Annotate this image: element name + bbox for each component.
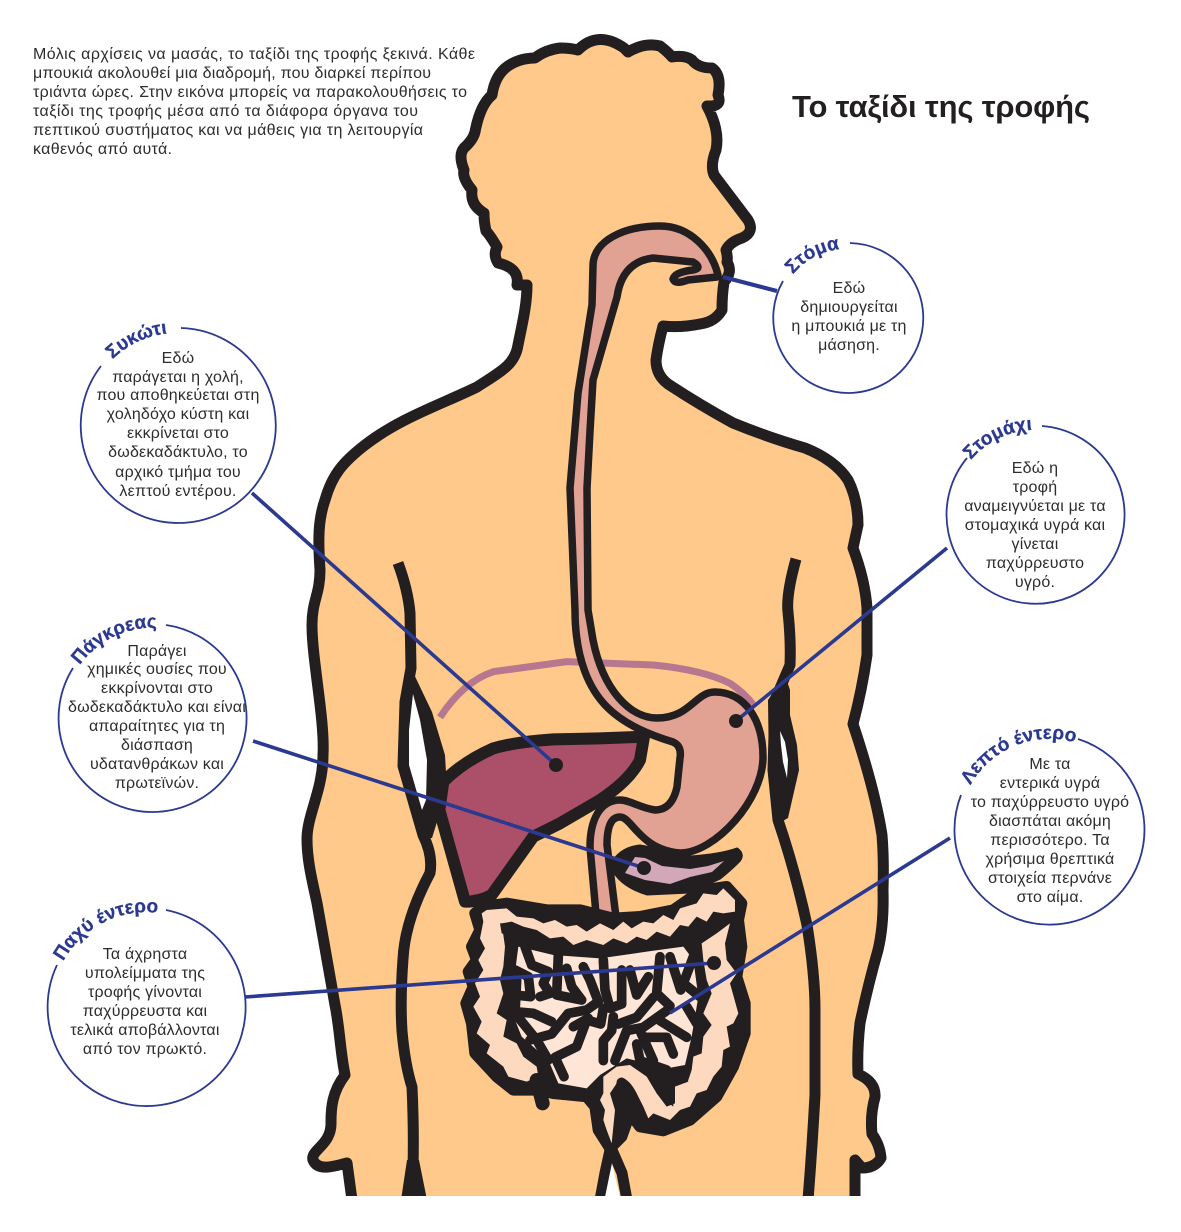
crotch xyxy=(600,1150,627,1200)
stomach pointer line xyxy=(736,548,947,721)
stomach pointer dot xyxy=(729,714,743,728)
large intestine text: παχύρρευστα και xyxy=(83,1003,208,1020)
large intestine circle xyxy=(48,910,246,1106)
liver text: που αποθηκεύεται στη xyxy=(96,387,260,404)
liver text: λεπτού εντέρου. xyxy=(119,483,237,500)
intro text: καθενός από αυτά. xyxy=(33,141,172,158)
pancreas pointer dot xyxy=(637,861,651,875)
liver pointer line xyxy=(252,493,556,765)
pancreas pointer line xyxy=(253,741,644,868)
intro text: ταξίδι της τροφής μέσα από τα διάφορα όργανα του xyxy=(33,103,418,120)
small intestine coils xyxy=(515,947,700,1077)
pancreas text: πρωτεϊνών. xyxy=(115,775,199,792)
large intestine label: Παχύ έντερο xyxy=(52,902,158,960)
stomach text: τροφή xyxy=(1013,479,1057,496)
stomach text: υγρό. xyxy=(1015,574,1055,591)
large intestine text: Τα άχρηστα xyxy=(103,946,187,963)
stomach circle xyxy=(947,426,1125,604)
intro text: τριάντα ώρες. Στην εικόνα μπορείς να παρακολουθήσεις το xyxy=(33,84,467,101)
mouth text xyxy=(791,280,907,354)
pancreas text: υδατανθράκων και xyxy=(90,756,224,773)
mouth circle xyxy=(773,243,923,393)
callout: large intestine xyxy=(46,902,721,1107)
left inner arm line xyxy=(398,563,431,1168)
pancreas text: δωδεκαδάκτυλο και είναι xyxy=(68,699,246,716)
callout: mouth xyxy=(722,239,924,394)
colon tail xyxy=(537,1080,543,1103)
small intestine text: εντερικά υγρά xyxy=(1000,775,1100,792)
mouth text: δημιουργείται xyxy=(800,299,898,316)
mouth text: Εδώ xyxy=(833,280,865,297)
liver text: Εδώ xyxy=(162,350,194,367)
small intestine circle xyxy=(954,739,1144,925)
small intestine text: στο αίμα. xyxy=(1017,889,1083,906)
liver text: χοληδόχο κύστη και xyxy=(107,406,250,423)
stomach text: αναμειγνύεται με τα xyxy=(964,498,1106,515)
liver xyxy=(439,737,644,902)
large intestine text: από τον πρωκτό. xyxy=(83,1041,207,1058)
small intestine text xyxy=(971,756,1129,906)
small intestine label: Λεπτό έντερο xyxy=(962,728,1076,786)
intro text: Μόλις αρχίσεις να μασάς, το ταξίδι της τροφής ξεκινά. Κάθε xyxy=(33,46,475,63)
pancreas label: Πάγκρεας xyxy=(70,617,156,664)
small intestine text: διασπάται ακόμη xyxy=(989,813,1111,830)
intro text xyxy=(33,46,475,158)
colon band xyxy=(473,888,735,1082)
mouth text: μάσηση. xyxy=(818,337,880,354)
large and small intestine xyxy=(466,887,745,1148)
bottom crop edge xyxy=(0,1196,1181,1232)
small intestine text: Με τα xyxy=(1029,756,1071,773)
liver text: αρχικό τμήμα του xyxy=(115,464,241,481)
pancreas circle xyxy=(59,625,247,812)
large intestine pointer dot xyxy=(707,956,721,970)
liver label: Συκώτι xyxy=(104,324,167,359)
callout: small intestine xyxy=(669,728,1146,1014)
armpit gaps xyxy=(409,694,427,810)
mouth pointer line xyxy=(723,277,777,291)
mouth text: η μπουκιά με τη xyxy=(791,318,907,335)
large intestine text: τροφής γίνονται xyxy=(88,984,202,1001)
pancreas text: εκκρίνονται στο xyxy=(101,680,213,697)
large intestine text xyxy=(70,946,220,1058)
pancreas text: απαραίτητες για τη xyxy=(89,718,225,735)
diaphragm xyxy=(440,662,753,717)
mouth label: Στόμα xyxy=(784,239,840,274)
intro text: πεπτικού συστήματος και να μάθεις για τη λειτουργία xyxy=(33,122,423,139)
stomach text: γίνεται xyxy=(1012,536,1059,553)
callout: pancreas xyxy=(58,617,651,875)
liver text: εκκρίνεται στο xyxy=(127,425,229,442)
callout: stomach xyxy=(729,420,1126,728)
pancreas text: Παράγει xyxy=(127,643,187,660)
callout: liver xyxy=(80,324,563,772)
liver text xyxy=(96,350,260,500)
pancreas text: διάσπαση xyxy=(121,737,193,754)
large intestine pointer line xyxy=(245,963,714,997)
stomach label: Στομάχι xyxy=(962,420,1032,460)
small intestine pointer line xyxy=(670,838,950,1013)
large intestine text: υπολείμματα της xyxy=(85,965,205,982)
stomach text xyxy=(964,460,1106,591)
pancreas text: χημικές ουσίες που xyxy=(87,661,227,678)
liver text: παράγεται η χολή, xyxy=(112,369,244,386)
small intestine text: το παχύρρευστο υγρό xyxy=(971,794,1129,811)
small intestine text: χρήσιμα θρεπτικά xyxy=(985,851,1115,868)
colon outline xyxy=(466,887,745,1148)
liver text: δωδεκαδάκτυλο, το xyxy=(108,444,248,461)
stomach text: παχύρρευστο xyxy=(986,555,1084,572)
small intestine xyxy=(514,947,698,1088)
human body silhouette xyxy=(307,39,883,1200)
stomach text: στομαχικά υγρά και xyxy=(965,517,1106,534)
oesophagus and stomach xyxy=(570,226,763,925)
title: Το ταξίδι της τροφής xyxy=(792,89,1090,124)
liver circle xyxy=(81,328,276,523)
intro text: μπουκιά ακολουθεί μια διαδρομή, που διαρκεί περίπου xyxy=(33,65,431,82)
right inner arm line xyxy=(773,559,815,1200)
small intestine text: περισσότερο. Τα xyxy=(990,832,1110,849)
pancreas xyxy=(611,846,741,894)
liver pointer dot xyxy=(549,758,563,772)
small intestine text: στοιχεία περνάνε xyxy=(988,870,1112,887)
large intestine text: τελικά αποβάλλονται xyxy=(70,1022,220,1039)
stomach text: Εδώ η xyxy=(1012,460,1058,477)
pancreas text xyxy=(68,643,246,792)
colon folds xyxy=(500,923,688,1118)
